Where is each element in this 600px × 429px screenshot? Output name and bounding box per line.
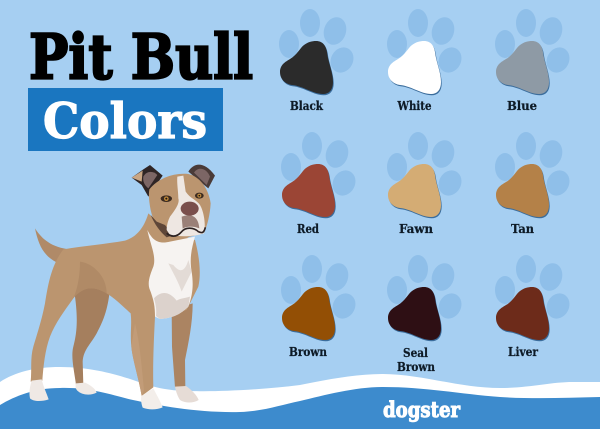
paw: Tan: Tan (511, 222, 534, 236)
paw: Fawn (387, 132, 466, 236)
white chest (147, 230, 195, 319)
illustration: pit bull dog (29, 165, 215, 409)
paw: Tan (495, 132, 574, 236)
paw: Seal Brown (387, 255, 466, 374)
paw: Blue (495, 9, 574, 113)
paw: Red (281, 132, 360, 236)
paw: Seal Brown: Seal (403, 346, 428, 360)
head (149, 174, 211, 237)
front leg highlight (131, 323, 144, 396)
right ear (188, 165, 215, 188)
paw: front right (175, 386, 199, 402)
title banner: Colors: Colors (43, 92, 207, 150)
paw: White (387, 9, 466, 113)
white wave (0, 367, 600, 429)
back leg (72, 280, 110, 385)
tail (35, 228, 67, 262)
dogster logo: dogster (383, 397, 461, 422)
title: Pit Bull: Pit Bull (29, 20, 253, 94)
left eye (161, 195, 172, 202)
paw: Brown (281, 255, 360, 359)
paw: Black: Black (290, 99, 324, 113)
muzzle shade (182, 215, 199, 229)
nose (181, 202, 199, 216)
mouth (167, 227, 205, 236)
paw: front left (141, 388, 163, 409)
neck collar shadow (151, 215, 173, 237)
paw: Brown: Brown (289, 345, 327, 359)
left ear (132, 165, 163, 197)
far front leg (172, 303, 193, 387)
body (31, 213, 200, 396)
paw: Liver: Liver (508, 345, 539, 359)
paw: Black (279, 9, 358, 113)
paw: rear right (76, 383, 97, 395)
chest shadow (154, 293, 190, 319)
paw: Liver (495, 255, 574, 359)
blue wave footer (0, 387, 600, 429)
face blaze and muzzle (167, 176, 205, 236)
right eye (195, 193, 204, 199)
paw: Seal Brown: Brown (397, 360, 435, 374)
chest fold (168, 260, 192, 292)
paw: rear left (29, 379, 49, 401)
body shading (73, 262, 107, 298)
paw: Blue: Blue (507, 99, 537, 113)
paw: White: White (397, 99, 432, 113)
paw: Red: Red (297, 222, 320, 236)
paw: Fawn: Fawn (399, 222, 433, 236)
